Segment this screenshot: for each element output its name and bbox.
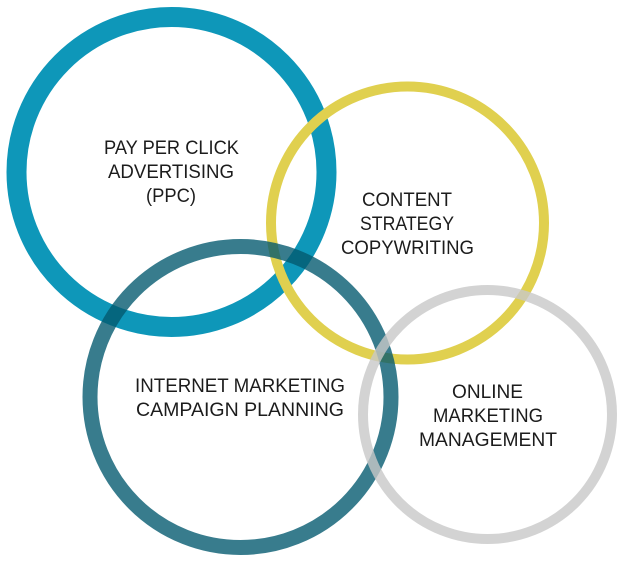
label: online marketing management: MARKETING — [433, 406, 543, 427]
label: pay per click advertising — [104, 138, 239, 207]
label: content strategy copywriting: CONTENT — [362, 190, 452, 211]
label: online marketing management: ONLINE — [452, 382, 523, 403]
label: content strategy copywriting: STRATEGY — [360, 214, 454, 235]
label: internet marketing campaign planning — [135, 376, 345, 421]
label: pay per click advertising: (PPC) — [146, 186, 196, 207]
label: content strategy copywriting — [341, 190, 474, 259]
label: content strategy copywriting: COPYWRITING — [341, 238, 474, 259]
label: internet marketing campaign planning: CAMPAIGN PLANNING — [136, 400, 344, 421]
label: online marketing management — [419, 382, 557, 451]
label: internet marketing campaign planning: INTERNET MARKETING — [135, 376, 345, 397]
circle: online marketing management (grey ring) — [363, 290, 612, 539]
circle: pay per click (blue ring) — [16, 17, 326, 327]
label: online marketing management: MANAGEMENT — [419, 430, 557, 451]
circle: content strategy (yellow ring) — [271, 86, 544, 360]
circle: campaign planning (dark teal ring) — [90, 246, 391, 548]
label: pay per click advertising: PAY PER CLICK — [104, 138, 239, 159]
label: pay per click advertising: ADVERTISING — [108, 162, 234, 183]
